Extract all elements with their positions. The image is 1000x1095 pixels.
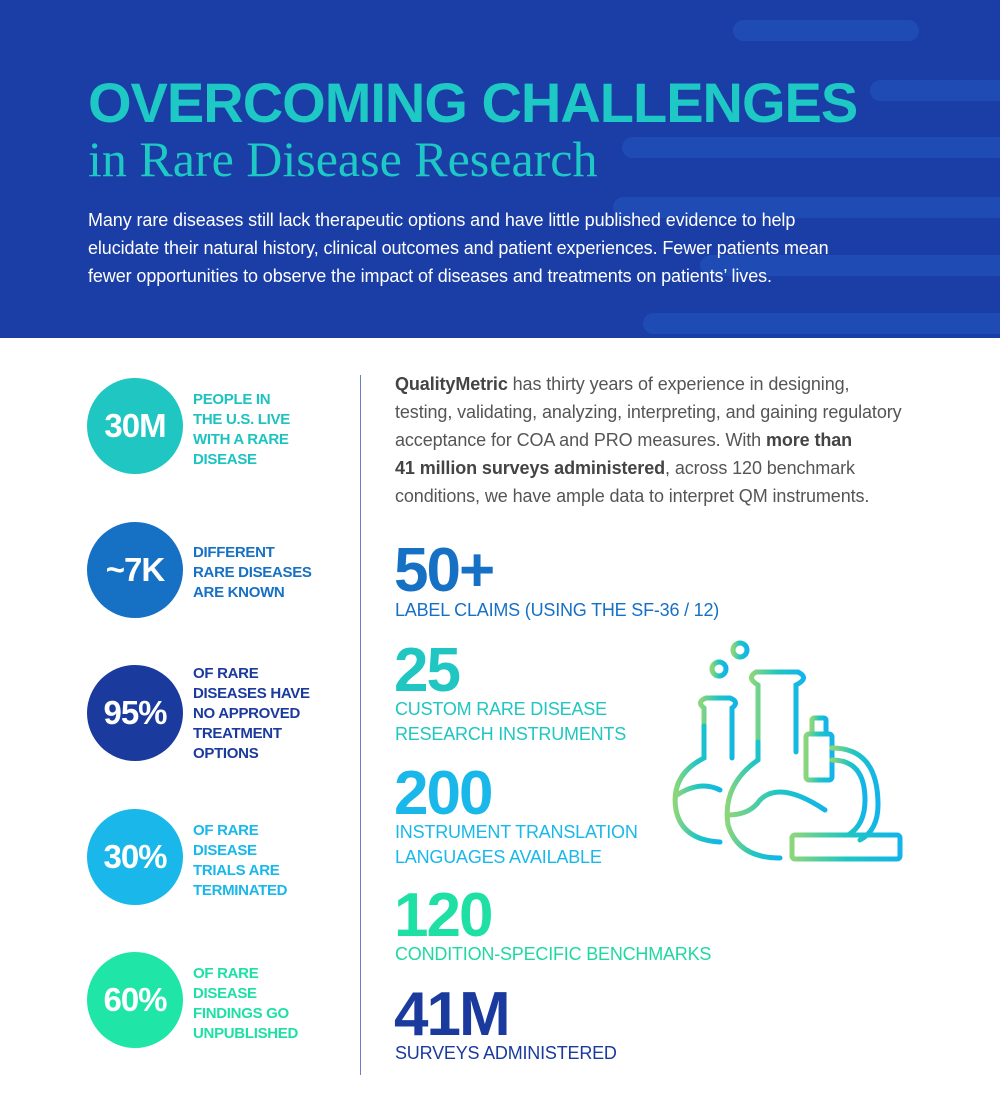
subtitle: in Rare Disease Research	[88, 131, 598, 187]
label: 7K	[193, 544, 312, 601]
stat: 60%	[87, 952, 183, 1048]
intro text	[88, 210, 829, 286]
paragraph	[395, 374, 902, 506]
label: 95%: OF RARE	[193, 665, 258, 682]
paragraph: conditions, we have ample data to interpret QM instruments.	[395, 486, 869, 506]
header panel	[0, 0, 1000, 338]
label: 30M: WITH A RARE	[193, 431, 289, 448]
metric 200: 200	[394, 759, 491, 828]
metric 50+: 50+	[394, 536, 493, 605]
paragraph: testing, validating, analyzing, interpreting, and gaining regulatory	[395, 402, 902, 422]
metric 25 label: RESEARCH INSTRUMENTS	[395, 724, 626, 744]
stat: 30%	[87, 809, 183, 905]
label: 60%: FINDINGS GO	[193, 1005, 289, 1022]
metric 25: 25	[394, 636, 459, 705]
metric 25 label: CUSTOM RARE DISEASE	[395, 699, 607, 719]
label: 30M: PEOPLE IN	[193, 391, 270, 408]
metric 120: 120	[394, 881, 491, 950]
stat: 7K: ~7K	[106, 551, 164, 588]
stat: 30M	[87, 378, 183, 474]
metric 50+ label: LABEL CLAIMS (USING THE SF-36 / 12)	[395, 600, 719, 620]
stat: 60%: 60%	[103, 981, 167, 1018]
label: 95%: NO APPROVED	[193, 705, 300, 722]
label: 30%: DISEASE	[193, 842, 257, 859]
label: 30M: THE U.S. LIVE	[193, 411, 290, 428]
metric 200 label	[395, 822, 638, 867]
stat: 95%	[87, 665, 183, 761]
label: 30%: OF RARE	[193, 822, 258, 839]
stat: 30M: 30M	[104, 407, 166, 444]
paragraph: acceptance for COA and PRO measures. With more than	[395, 430, 852, 450]
stat: 7K	[87, 522, 183, 618]
metric 120 label: CONDITION-SPECIFIC BENCHMARKS	[395, 944, 711, 964]
metric 25 label	[395, 699, 626, 744]
icon: lab flasks and microscope	[672, 640, 902, 862]
label: 60%: DISEASE	[193, 985, 257, 1002]
label: 30M: DISEASE	[193, 451, 257, 468]
title: OVERCOMING CHALLENGES	[88, 71, 857, 134]
paragraph: QualityMetric has thirty years of experience in designing,	[395, 374, 849, 394]
label: 60%: OF RARE	[193, 965, 258, 982]
intro text: elucidate their natural history, clinical outcomes and patient experiences. Fewer patients mean	[88, 238, 829, 258]
intro text: Many rare diseases still lack therapeutic options and have little published evidence to help	[88, 210, 795, 230]
metric 200 label: INSTRUMENT TRANSLATION	[395, 822, 638, 842]
metric 200 label: LANGUAGES AVAILABLE	[395, 847, 602, 867]
label: 30%	[193, 822, 287, 899]
label: 7K: DIFFERENT	[193, 544, 274, 561]
label: 95%: OPTIONS	[193, 745, 258, 762]
metric 41M: 41M	[394, 980, 509, 1049]
label: 7K: RARE DISEASES	[193, 564, 312, 581]
stat: 95%: 95%	[103, 694, 167, 731]
label: 60%: UNPUBLISHED	[193, 1025, 298, 1042]
intro text: fewer opportunities to observe the impact of diseases and treatments on patients’ lives.	[88, 266, 772, 286]
paragraph: 41 million surveys administered, across 120 benchmark	[395, 458, 855, 478]
label: 30M	[193, 391, 290, 468]
label: 95%	[193, 665, 310, 762]
label: 30%: TRIALS ARE	[193, 862, 279, 879]
label: 60%	[193, 965, 298, 1042]
label: 30%: TERMINATED	[193, 882, 287, 899]
metric 41M label: SURVEYS ADMINISTERED	[395, 1043, 617, 1063]
label: 95%: DISEASES HAVE	[193, 685, 310, 702]
stat: 30%: 30%	[103, 838, 167, 875]
label: 95%: TREATMENT	[193, 725, 282, 742]
label: 7K: ARE KNOWN	[193, 584, 284, 601]
